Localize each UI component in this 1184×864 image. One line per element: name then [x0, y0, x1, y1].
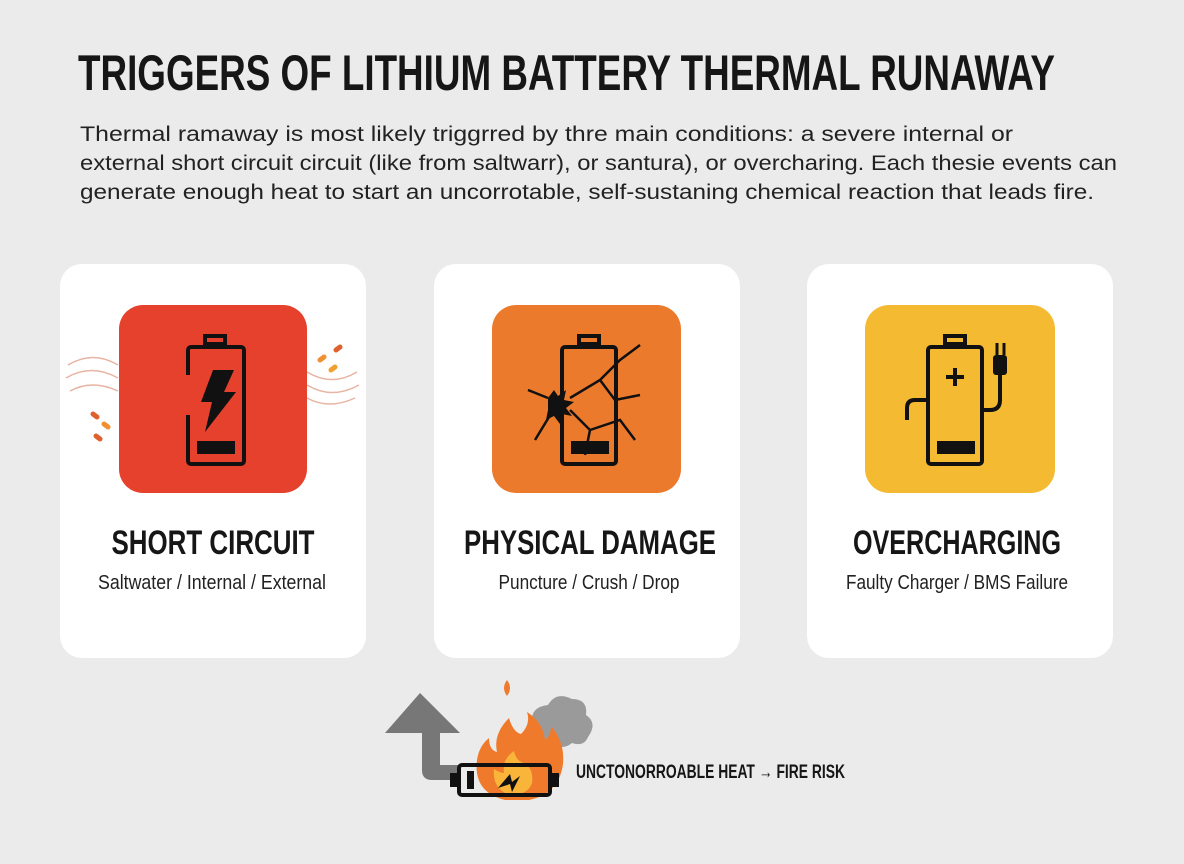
icon: smoke cloud	[525, 696, 593, 747]
card subtitle: Puncture / Crush / Drop	[498, 572, 680, 594]
panel: short circuit	[60, 264, 366, 658]
icon: charging battery	[865, 305, 1055, 493]
icon: up arrow	[385, 693, 460, 780]
intro paragraph	[80, 123, 1117, 204]
card title: PHYSICAL DAMAGE	[464, 524, 716, 562]
icon: short circuit battery	[66, 305, 359, 493]
intro paragraph: external short circuit circuit (like from saltwarr), or santura), or overcharing. Each thesie events can	[80, 152, 1117, 175]
card title: OVERCHARGING	[853, 524, 1061, 562]
intro paragraph: Thermal ramaway is most likely triggrred by thre main conditions: a severe internal or	[80, 123, 1013, 146]
icon: flame	[477, 712, 563, 800]
intro paragraph: generate enough heat to start an uncorrotable, self-sustaning chemical reaction that leads fire.	[80, 181, 1094, 204]
card subtitle: Saltwater / Internal / External	[98, 572, 326, 594]
panel: overcharging	[807, 264, 1113, 658]
card title: SHORT CIRCUIT	[112, 524, 315, 562]
card subtitle: Faulty Charger / BMS Failure	[846, 572, 1068, 594]
bottom label: UNCTONORROABLE HEAT → FIRE RISK	[576, 762, 845, 783]
panel: physical damage	[434, 264, 740, 658]
icon: battery outline	[459, 765, 550, 795]
bottom: fire risk icon group	[385, 680, 593, 800]
icon: cracked battery	[492, 305, 681, 493]
